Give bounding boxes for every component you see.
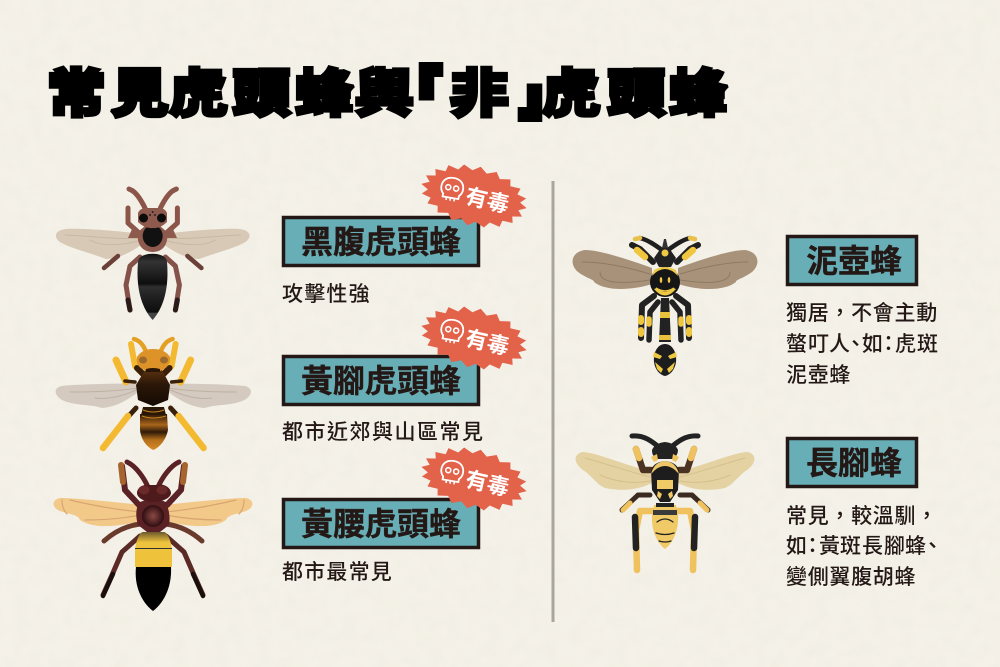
divider — [552, 181, 554, 622]
badge: poisonous 1: 有毒 — [463, 183, 512, 218]
label: 黃腳虎頭蜂: 黃腳虎頭蜂 — [301, 363, 461, 399]
label: 黃腳虎頭蜂 — [284, 356, 478, 404]
icon: yellow-waisted hornet — [54, 462, 252, 611]
icon: black-bellied hornet — [56, 189, 249, 320]
label: 長腳蜂 — [788, 438, 916, 486]
badge: poisonous 2 — [415, 297, 533, 379]
description: 攻擊性強: 攻擊性強 — [282, 283, 371, 306]
label: 黃腰虎頭蜂 — [284, 500, 478, 548]
label: 泥壺蜂: 泥壺蜂 — [806, 243, 902, 279]
description: 泥壺蜂 — [786, 302, 938, 387]
label: 長腳蜂: 長腳蜂 — [806, 445, 902, 481]
badge: poisonous 1 — [415, 155, 533, 237]
description: 長腳蜂: 常見，較溫馴， — [786, 505, 938, 528]
icon: potter wasp — [573, 238, 757, 376]
title: 常見虎頭蜂與非虎頭蜂 — [47, 65, 728, 123]
description: 都市最常見: 都市最常見 — [282, 561, 393, 584]
description: 長腳蜂: 如：黃斑長腳蜂、 — [786, 535, 943, 558]
description: 泥壺蜂: 螫叮人、如：虎斑 — [786, 333, 938, 356]
icon: paper wasp — [576, 436, 754, 570]
badge: poisonous 3 — [415, 438, 533, 520]
badge: poisonous 2: 有毒 — [463, 325, 512, 360]
title: 」 — [521, 71, 567, 123]
description: 長腳蜂 — [786, 505, 943, 589]
description: 泥壺蜂: 泥壺蜂 — [786, 364, 851, 387]
description: 長腳蜂: 變側翼腹胡蜂 — [786, 566, 916, 589]
label: 黑腹虎頭蜂: 黑腹虎頭蜂 — [301, 224, 461, 260]
label: 黑腹虎頭蜂 — [284, 218, 478, 266]
icon: yellow-legged hornet — [56, 339, 251, 450]
description: 都市近郊: 都市近郊與山區常見 — [282, 421, 484, 444]
description: 泥壺蜂: 獨居，不會主動 — [786, 302, 938, 325]
label: 泥壺蜂 — [788, 236, 916, 284]
label: 黃腰虎頭蜂: 黃腰虎頭蜂 — [301, 506, 461, 542]
badge: poisonous 3: 有毒 — [463, 466, 512, 501]
title: 「 — [394, 64, 440, 116]
